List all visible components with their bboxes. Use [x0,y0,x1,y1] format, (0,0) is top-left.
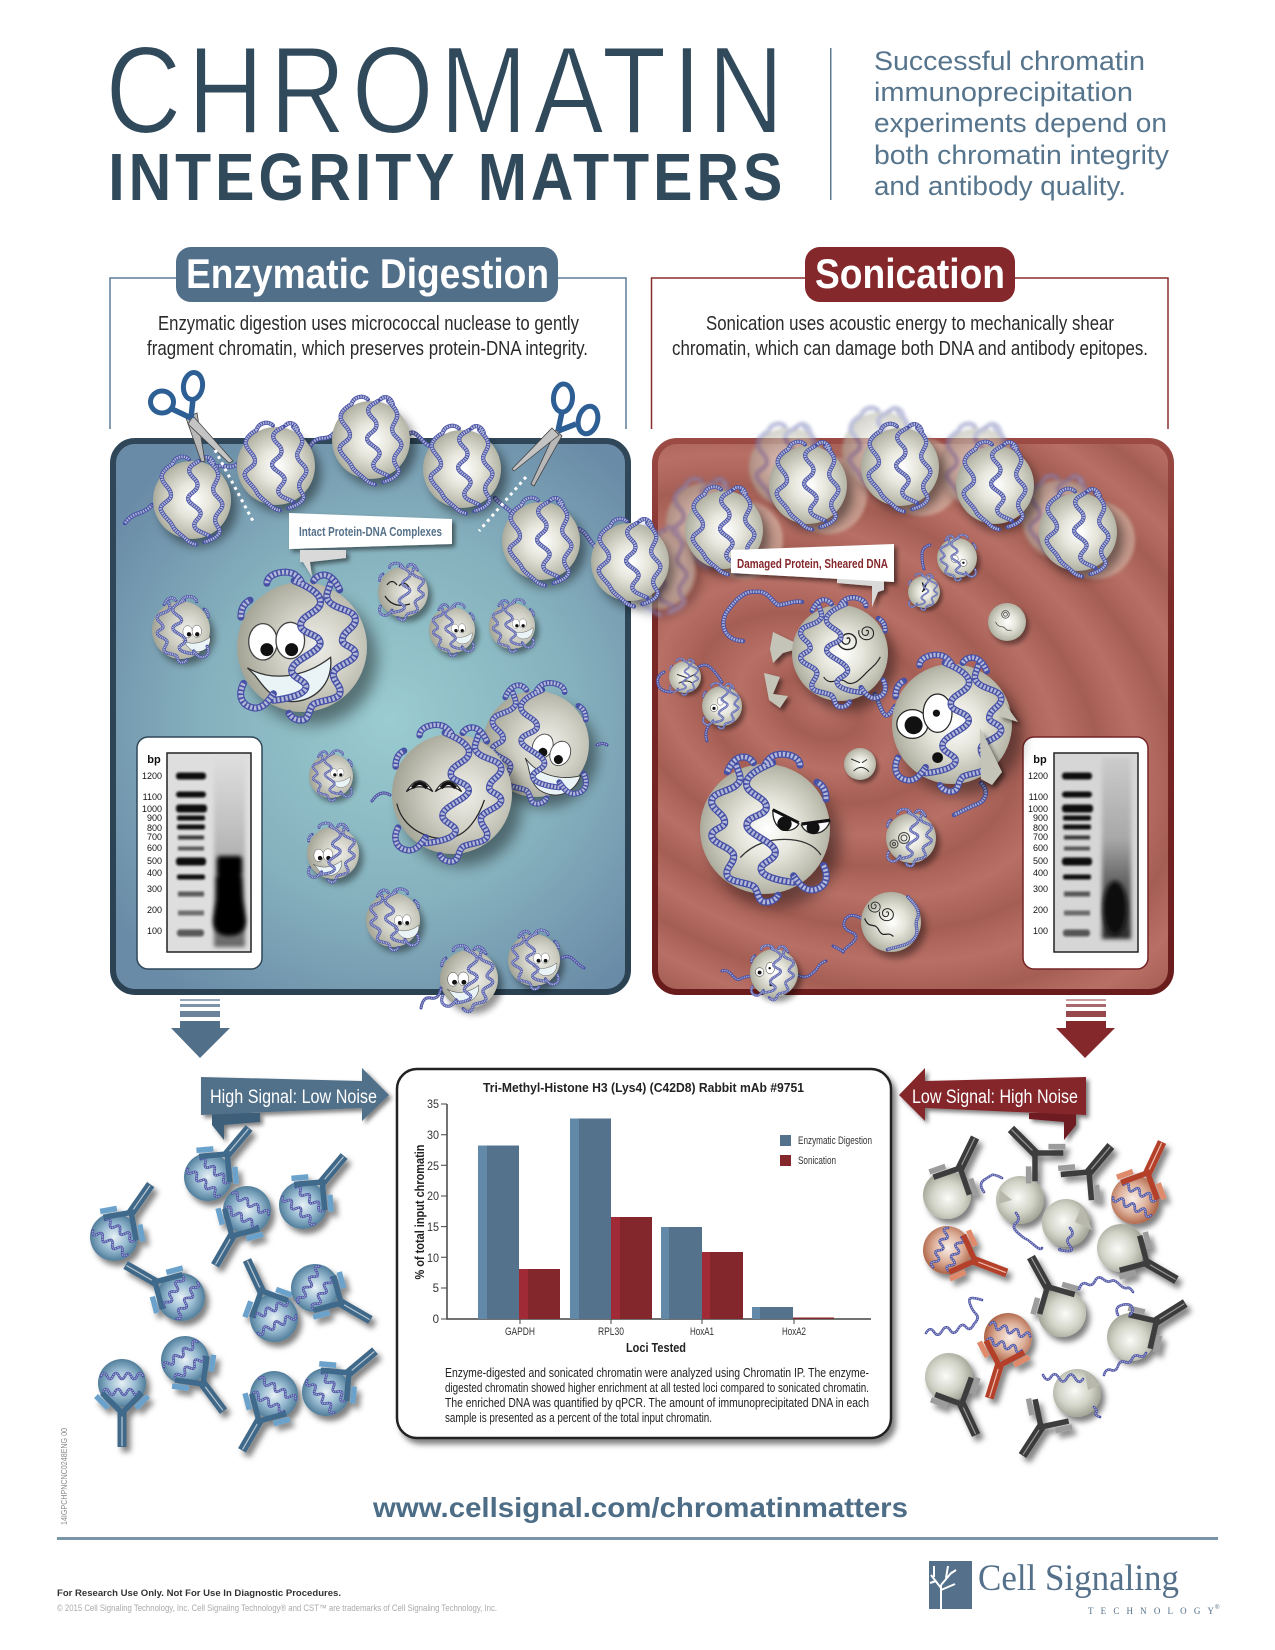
antibody cluster: high signal [79,1111,392,1463]
gel: sonication: 700 [1033,832,1048,842]
text: sonication description [672,313,1148,360]
gel: enzymatic: 500 [147,856,162,866]
gel: sonication: 1100 [1029,792,1048,802]
bar chart: % of total input chromatin [412,1144,427,1280]
gel: enzymatic: 1100 [143,792,162,802]
text: sonication description: Sonication uses acoustic energy to mechanically shear [706,313,1114,335]
nucleosome chain: sonication [591,424,1123,609]
nucleosome: big happy [237,572,377,725]
nucleosome: bottom dizzy [750,945,802,1002]
gel: enzymatic [137,737,262,969]
nucleosome: laughing [392,725,522,866]
nucleosome: damaged spiral eyes [792,598,896,711]
nucleosome: lower spiral [861,892,926,958]
nucleosome: big surprised [892,655,1022,796]
nucleosome: tiny angry [844,748,879,783]
gel: enzymatic: 700 [147,832,162,842]
text: enzymatic description: Enzymatic digestion uses micrococcal nuclease to gently [158,313,579,335]
panel: sonication [655,441,1171,992]
banner: high signal: High Signal: Low Noise [210,1087,377,1108]
text: enzymatic description: fragment chromatin, which preserves protein-DNA integrity. [147,338,588,360]
gel: sonication: bp [1033,754,1047,766]
nucleosome: tiny top [908,574,943,611]
chart caption: digested chromatin showed higher enrichment at all tested loci compared to sonicated chromatin. [445,1381,869,1395]
footer rule [57,1537,1218,1540]
logo [929,1558,1220,1616]
bar chart: HoxA1 [690,1326,714,1338]
banner: low signal [899,1068,1086,1140]
nucleosome: small happy [366,889,424,952]
gel: sonication: 600 [1033,843,1048,853]
cut line right [479,477,526,531]
gel: enzymatic: bp [147,754,161,766]
gel: sonication: 500 [1033,856,1048,866]
gel: enzymatic: 800 [147,823,162,833]
logo: ® [1215,1604,1220,1611]
chart caption: The enriched DNA was quantified by qPCR. The amount of immunoprecipitated DNA in each [445,1396,869,1410]
scissors right [512,383,601,486]
text: enzymatic description [147,313,588,360]
bar chart: 0 [433,1314,439,1326]
banner: low signal: Low Signal: High Noise [912,1087,1078,1108]
gel: enzymatic: 900 [147,813,162,823]
bar chart: 30 [427,1130,439,1142]
gel: sonication: 900 [1033,813,1048,823]
nucleosome: small happy left [152,597,215,665]
arrow down right [1056,999,1115,1058]
gel: enzymatic: 600 [147,843,162,853]
bar chart: 5 [433,1283,439,1295]
bar chart: GAPDH [505,1326,535,1338]
dna tail: small loops [372,545,930,1008]
intro text: experiments depend on [874,108,1167,138]
debris: surprised pieces [980,704,1018,785]
callout: intact: Intact Protein-DNA Complexes [299,525,442,539]
chart caption: sample is presented as a percent of the total input chromatin. [445,1411,712,1425]
gel: sonication: 1000 [1028,804,1048,814]
footer disclaimer: For Research Use Only. Not For Use In Diagnostic Procedures. [57,1588,341,1599]
logo: Cell Signaling [978,1558,1179,1599]
bar chart: 20 [427,1191,439,1203]
bar chart: 10 [427,1253,439,1265]
chart caption [445,1366,869,1425]
print code: 14IGPCHPNCNC0248ENG 00 [60,1428,69,1525]
scissors left [150,371,233,463]
gel: sonication: 300 [1033,884,1048,894]
nucleosome: plain dazed [988,603,1029,645]
bar chart: 25 [427,1161,439,1173]
dna links: enzymatic chain [125,432,600,548]
gel: enzymatic: 300 [147,884,162,894]
gel: enzymatic: 100 [147,926,162,936]
chart caption: Enzyme-digested and sonicated chromatin were analyzed using Chromatin IP. The enzyme- [445,1366,869,1380]
intro text: both chromatin integrity [874,140,1170,170]
chart title: Tri-Methyl-Histone H3 (Lys4) (C42D8) Rabbit mAb #9751 [483,1080,804,1095]
free dna strands [926,1175,1146,1417]
debris: broken protein pieces [764,632,804,708]
nucleosome: escaping bottom [440,946,503,1014]
chart panel [397,1069,891,1438]
nucleosome: escaping bottom right [508,930,564,991]
bar chart: RPL30 [598,1326,624,1338]
intro text: Successful chromatin [874,46,1145,76]
intro text [874,46,1170,201]
gel: sonication [1023,737,1148,969]
footer disclaimer: © 2015 Cell Signaling Technology, Inc. Cell Signaling Technology® and CST™ are trademarks of Cell Signaling Technology, Inc. [57,1603,497,1613]
gel: enzymatic: 1200 [142,771,162,781]
gel: sonication: 200 [1033,905,1048,915]
cut line left [215,450,254,523]
nucleosome: small happy [309,751,357,802]
bar chart: HoxA2 [782,1326,806,1338]
ghost nucleosome chain: sonication [617,408,1135,617]
nucleosome: small happy [429,604,479,658]
callout: damaged: Damaged Protein, Sheared DNA [737,557,888,571]
bar chart [412,1099,871,1355]
nucleosome: small grumpy [669,659,704,696]
nucleosome: big angry [700,754,840,907]
gel: sonication: 100 [1033,926,1048,936]
panel: enzymatic digestion [113,441,628,992]
nucleosome: big happy right [483,683,597,808]
chart legend [780,1135,872,1167]
nucleosome: small dizzy [702,683,745,730]
dna tail: sonication long [723,592,986,815]
gel: sonication: 400 [1033,868,1048,878]
callout: intact [289,513,452,577]
chart legend: Enzymatic Digestion [798,1135,872,1147]
nucleosome chain: enzymatic [153,397,586,588]
callout: damaged [731,544,894,607]
chart legend: Sonication [798,1155,836,1167]
heading: enzymatic digestion: Enzymatic Digestion [186,250,549,297]
nucleosome: small happy [489,600,539,654]
antibody-bound nucleosome [173,1111,269,1212]
title: INTEGRITY MATTERS [108,141,782,215]
antibody cluster: low signal [913,1111,1199,1470]
divider [830,48,832,200]
gel: sonication: 1200 [1028,771,1048,781]
gel: enzymatic: 200 [147,905,162,915]
bar chart: 35 [427,1099,439,1111]
text: sonication description: chromatin, which can damage both DNA and antibody epitopes. [672,338,1148,360]
logo: TECHNOLOGY [1088,1606,1214,1616]
bracket right [652,278,1168,429]
bracket left [110,278,626,429]
nucleosome: small spiral [886,809,940,868]
nucleosome: small happy [307,823,363,884]
bar chart: Loci Tested [626,1340,686,1355]
url: www.cellsignal.com/chromatinmatters [372,1492,908,1523]
banner: high signal [201,1068,389,1140]
bound protein [913,1126,998,1228]
gel: enzymatic: 1000 [142,804,162,814]
title: CHROMATIN [105,22,784,160]
heading: sonication: Sonication [815,250,1005,297]
nucleosome: small winking [378,563,432,622]
bar chart: 15 [427,1222,439,1234]
footer disclaimer [57,1588,497,1613]
intro text: immunoprecipitation [874,77,1133,107]
arrow down left [171,999,230,1058]
nucleosome: small dizzy top [937,535,980,582]
gel: enzymatic: 400 [147,868,162,878]
intro text: and antibody quality. [874,171,1126,201]
gel: sonication: 800 [1033,823,1048,833]
